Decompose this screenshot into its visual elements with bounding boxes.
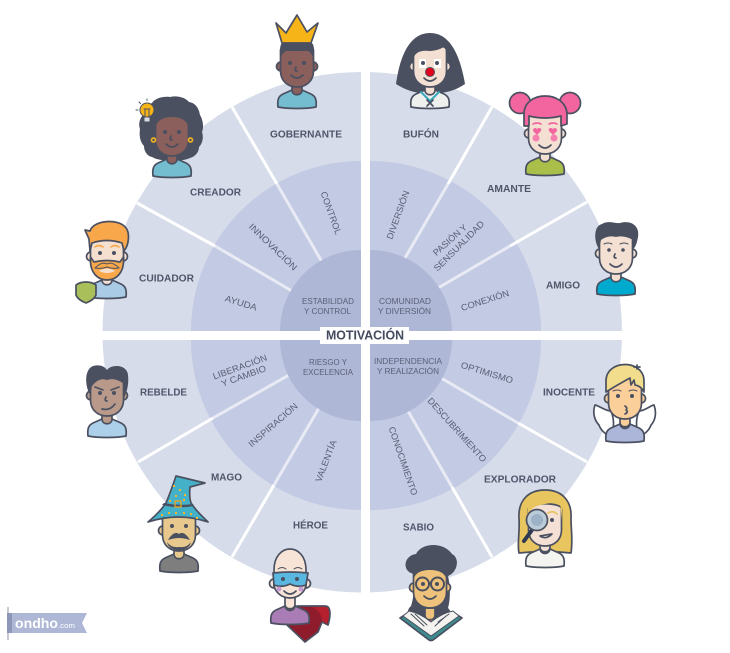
hair — [518, 490, 572, 553]
red nose — [426, 68, 434, 76]
beard — [167, 542, 191, 550]
heart eyes — [533, 128, 557, 135]
sector labels: CREADOR — [190, 188, 242, 198]
magnifying glass — [524, 510, 548, 541]
sector dividers inside middle ring — [213, 184, 518, 487]
middle ring labels: VALENTÍA — [313, 439, 339, 483]
light bulb — [136, 99, 158, 122]
sector labels: AMIGO — [546, 280, 580, 292]
middle ring labels: AYUDA — [224, 293, 258, 313]
sector labels: CUIDADOR — [139, 274, 195, 284]
middle ring labels: Y CAMBIO — [220, 363, 267, 389]
inner ring labels: Y REALIZACIÓN — [377, 366, 439, 376]
middle ring labels: INSPIRACIÓN — [246, 401, 300, 449]
inner ring labels: ESTABILIDAD — [302, 296, 354, 306]
inner ring labels: INDEPENDENCIA — [374, 356, 442, 366]
wings — [594, 405, 655, 437]
hair — [606, 364, 644, 392]
middle ring — [191, 161, 541, 510]
hair — [85, 222, 128, 251]
hair buns — [510, 92, 530, 114]
sector labels: EXPLORADOR — [484, 474, 557, 486]
character: cuidador — [76, 222, 128, 303]
inner ring labels: COMUNIDAD — [379, 296, 431, 306]
mask — [273, 572, 308, 586]
crown — [276, 15, 318, 43]
hair — [86, 365, 128, 398]
inner ring labels: RIESGO Y — [309, 357, 347, 367]
sector labels: INOCENTE — [543, 388, 595, 398]
ears and face — [410, 566, 450, 620]
middle ring labels: DESCUBRIMIENTO — [426, 396, 488, 464]
center title: MOTIVACIÓN — [326, 328, 404, 342]
middle ring labels: DIVERSIÓN — [385, 189, 411, 241]
hair — [406, 545, 457, 620]
wheel — [102, 72, 622, 592]
book — [400, 613, 462, 640]
character: gobernante — [276, 15, 318, 108]
middle ring labels: OPTIMISMO — [460, 360, 514, 385]
sector labels: MAGO — [211, 472, 242, 484]
shield — [76, 282, 96, 303]
logo: ondho.com: .com — [58, 623, 75, 630]
character: amante — [510, 92, 580, 176]
inner ring labels: Y DIVERSIÓN — [378, 306, 431, 316]
hair — [139, 96, 203, 161]
hair — [595, 222, 638, 249]
character: explorador — [518, 490, 572, 568]
character: rebelde — [86, 365, 128, 438]
character: amigo — [595, 222, 638, 296]
inner ring labels — [302, 296, 442, 377]
hair — [396, 33, 465, 93]
sector labels: GOBERNANTE — [270, 130, 342, 140]
glasses — [416, 578, 444, 590]
sector labels: REBELDE — [140, 388, 187, 398]
beard — [90, 257, 124, 280]
middle ring labels: PASIÓN Y — [431, 222, 469, 258]
sector labels: BUFÓN — [403, 128, 439, 140]
middle ring labels: LIBERACIÓN — [212, 353, 268, 381]
logo: ondho.com — [7, 607, 87, 640]
character: creador — [136, 96, 203, 178]
sector labels — [139, 128, 595, 534]
logo: ondho.com: ondho — [15, 615, 58, 631]
middle ring labels: CONOCIMIENTO — [387, 425, 419, 497]
character: inocente — [594, 364, 655, 442]
character: mago — [148, 476, 208, 572]
cape — [287, 606, 330, 642]
sector dividers — [137, 107, 587, 557]
outer ring — [102, 72, 622, 592]
character: heroe — [270, 549, 330, 642]
inner ring labels: Y CONTROL — [304, 306, 351, 316]
inner ring — [280, 250, 452, 421]
middle ring labels — [212, 189, 514, 497]
middle ring labels: INNOVACIÓN — [247, 222, 299, 272]
inner ring labels: EXCELENCIA — [303, 367, 353, 377]
wizard hat — [148, 476, 208, 522]
character: sabio — [400, 545, 462, 640]
sector labels: HÉROE — [293, 518, 328, 532]
sector labels: SABIO — [403, 522, 434, 534]
middle ring labels: SENSUALIDAD — [432, 218, 487, 273]
sector labels: AMANTE — [487, 184, 531, 195]
middle ring labels: CONTROL — [319, 190, 343, 236]
character: bufon — [396, 33, 465, 108]
middle ring labels: CONEXIÓN — [460, 288, 510, 313]
